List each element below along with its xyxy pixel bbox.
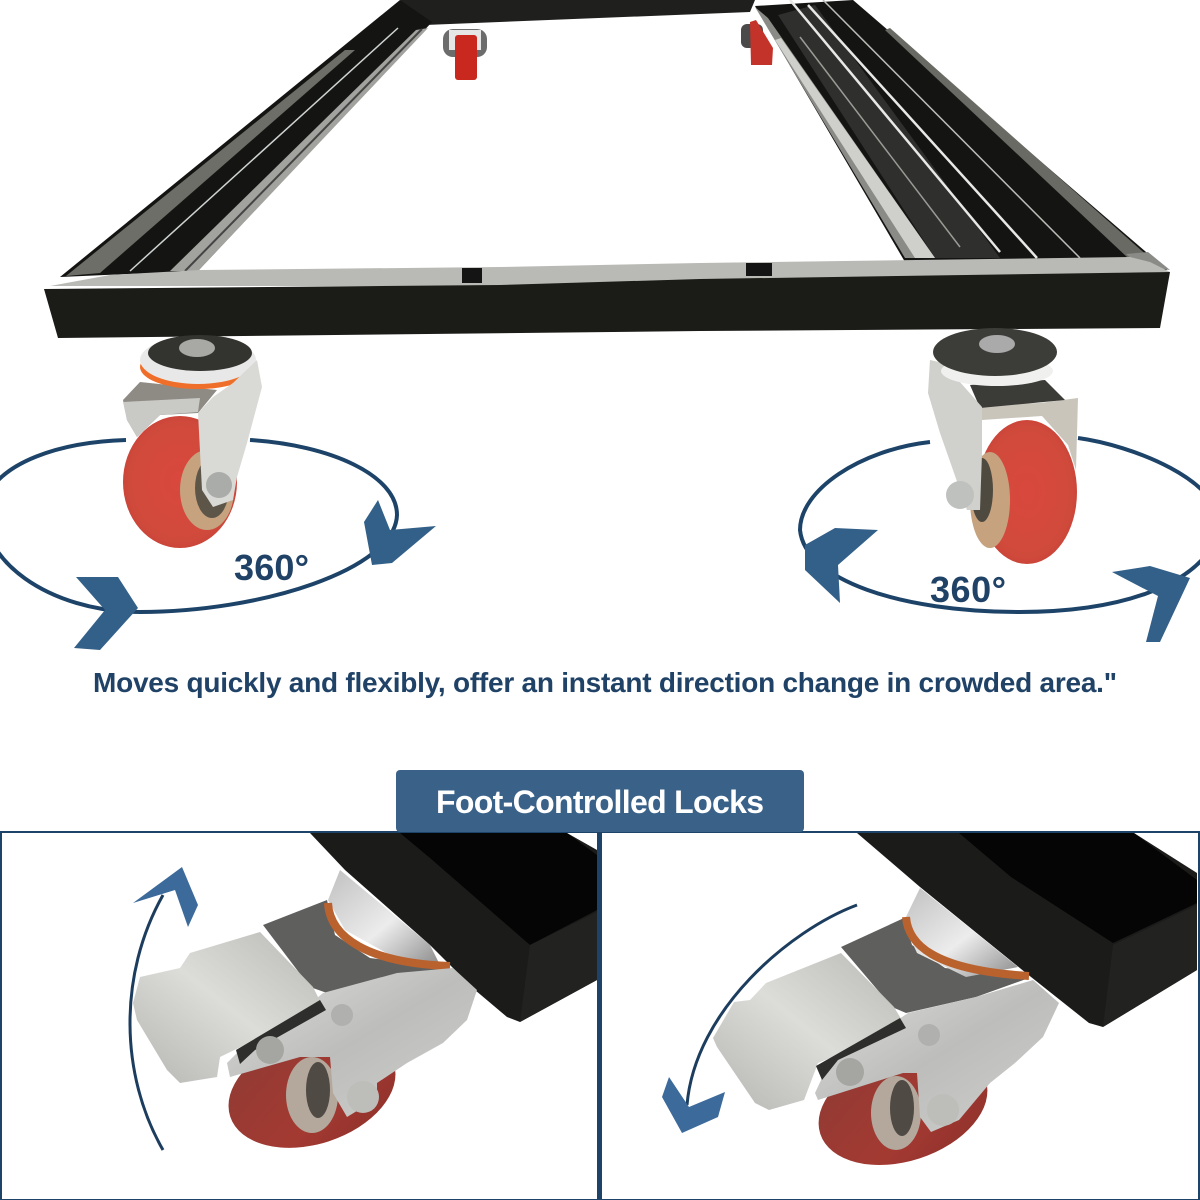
far right caster [741, 20, 773, 65]
far left caster [443, 29, 487, 80]
panel: right lock photo [601, 832, 1199, 1200]
side plate [815, 980, 1059, 1132]
brake pedal [133, 932, 323, 1083]
rear bar [400, 0, 755, 25]
down arrow [662, 905, 857, 1133]
side plate [227, 968, 477, 1117]
fork side [198, 360, 262, 507]
frame corner [857, 833, 1197, 1027]
wheel [804, 1029, 1002, 1185]
arrow head left [805, 528, 878, 603]
left rotation ring [0, 440, 436, 650]
left caster [123, 335, 262, 548]
label: right 360: 360° [930, 569, 1006, 610]
left rail [60, 0, 432, 277]
right caster [928, 328, 1078, 564]
swivel plate [941, 356, 1053, 386]
dolly frame [44, 0, 1170, 338]
heading tab: Foot-Controlled Locks [436, 784, 764, 820]
fork side [928, 360, 982, 510]
arrow head upper [364, 500, 436, 565]
panel: left lock photo [1, 832, 598, 1200]
front bar top [50, 257, 1170, 286]
wheel [123, 416, 237, 548]
notches [462, 268, 482, 283]
back bracket [123, 382, 217, 437]
orange ring [328, 903, 450, 966]
hub [970, 452, 1010, 548]
divider line [598, 832, 602, 1200]
dark bracket [841, 918, 1029, 1013]
bolt [206, 472, 232, 498]
brake pedal [713, 953, 906, 1110]
swivel disc [328, 870, 440, 965]
hub [180, 450, 234, 530]
rivets [918, 1024, 940, 1046]
caption: Moves quickly and flexibly, offer an instant direction change in crowded area." [93, 667, 1117, 698]
orange ring [906, 917, 1029, 976]
heading tab [396, 770, 804, 832]
arrow head right [1112, 566, 1190, 642]
arrow head lower [74, 577, 138, 650]
front bar face [44, 272, 1170, 338]
dark bracket [263, 900, 450, 993]
wheel [214, 1012, 410, 1168]
label: left 360: 360° [234, 547, 309, 588]
crossbar [980, 398, 1078, 470]
rivets [331, 1004, 353, 1026]
swivel disc [903, 888, 1018, 977]
bolt [946, 481, 974, 509]
wheel [977, 420, 1077, 564]
right rail [755, 0, 1170, 270]
up arrow [130, 867, 198, 1150]
frame corner [310, 833, 597, 1022]
right rotation ring [800, 438, 1200, 642]
swivel plate [140, 345, 256, 389]
